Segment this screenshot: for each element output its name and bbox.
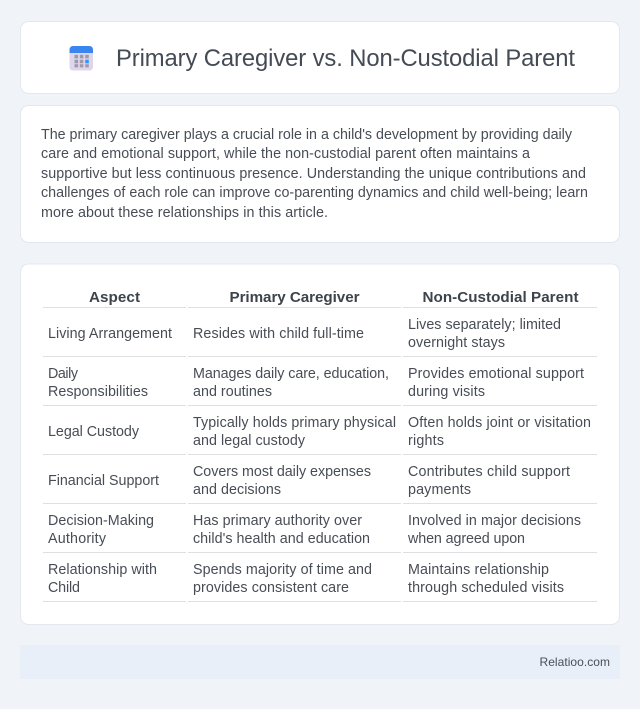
table row: Legal Custody: Legal Custody: [48, 424, 140, 440]
text block: introduction: [41, 127, 588, 221]
table row: Legal Custody: rights: [408, 433, 444, 449]
table row: Financial Support: Financial Support: [48, 473, 159, 489]
table row: Relationship with Child: Child: [48, 580, 80, 596]
table row: Legal Custody: and legal custody: [193, 433, 306, 449]
table row: Financial Support: and decisions: [193, 482, 281, 498]
table row: Decision-Making Authority: when agreed upon: [407, 531, 525, 547]
text block: introduction: challenges of each role can improve co-parenting dynamics and child well-being; learn: [41, 185, 588, 201]
table row: Daily Responsibilities: Manages daily care, education,: [193, 366, 389, 382]
panel: comparison table: [20, 264, 620, 624]
table row: Relationship with Child: [48, 562, 564, 596]
table row: Daily Responsibilities: and routines: [193, 384, 272, 400]
table row: Legal Custody: Typically holds primary physical: [193, 415, 396, 431]
table row: Living Arrangement: Resides with child full-time: [193, 326, 364, 342]
table row: Daily Responsibilities: Responsibilities: [48, 384, 148, 400]
table row: Financial Support: Covers most daily expenses: [193, 464, 371, 480]
table row: Legal Custody: [48, 415, 591, 449]
table row: Decision-Making Authority: Has primary authority over: [193, 513, 362, 529]
table header: [89, 289, 578, 306]
text block: introduction: supportive but less continuous presence. Understanding the unique contributions and: [41, 166, 586, 182]
table row: Living Arrangement: Living Arrangement: [48, 326, 172, 342]
table row: Decision-Making Authority: [48, 513, 581, 547]
table header: Primary Caregiver: [230, 289, 360, 306]
table row: Living Arrangement: overnight stays: [408, 335, 505, 351]
text block: introduction: care and emotional support, while the non-custodial parent often maintains a: [41, 146, 530, 162]
panel: introduction: [20, 106, 620, 242]
table row: Decision-Making Authority: Involved in major decisions: [408, 513, 581, 529]
text block: introduction: The primary caregiver plays a crucial role in a child's development by providing daily: [41, 127, 573, 143]
table row: Daily Responsibilities: Provides emotional support: [408, 366, 584, 382]
table row: Financial Support: [48, 464, 570, 498]
table row: Decision-Making Authority: Decision-Making: [48, 513, 154, 529]
footer bar: [20, 645, 620, 679]
footer credit: Relatioo.com: [540, 655, 610, 669]
table row: Daily Responsibilities: during visits: [408, 384, 485, 400]
icon: calendar: [70, 46, 93, 70]
table row: Financial Support: payments: [408, 482, 471, 498]
table header: Non-Custodial Parent: [422, 289, 578, 306]
text block: introduction: more about these relationships in this article.: [41, 205, 328, 221]
title: Primary Caregiver vs. Non-Custodial Parent: [116, 45, 575, 72]
table row: Relationship with Child: Maintains relationship: [408, 562, 549, 578]
table row: Living Arrangement: Lives separately; limited: [408, 317, 561, 333]
table row: Decision-Making Authority: child's health and education: [193, 531, 370, 547]
table row: Living Arrangement: [48, 317, 561, 351]
table row: Relationship with Child: Relationship with: [48, 562, 157, 578]
table row: Decision-Making Authority: Authority: [48, 531, 107, 547]
table row: Legal Custody: Often holds joint or visitation: [408, 415, 591, 431]
table header: Aspect: [89, 289, 140, 306]
table row: Financial Support: Contributes child support: [408, 464, 570, 480]
panel: title header: [20, 22, 620, 94]
table row: Daily Responsibilities: Daily: [48, 366, 79, 382]
table row: Relationship with Child: through scheduled visits: [408, 580, 564, 596]
table row: Relationship with Child: Spends majority of time and: [193, 562, 372, 578]
table row: Daily Responsibilities: [48, 366, 584, 400]
table row: Relationship with Child: provides consistent care: [193, 580, 349, 596]
